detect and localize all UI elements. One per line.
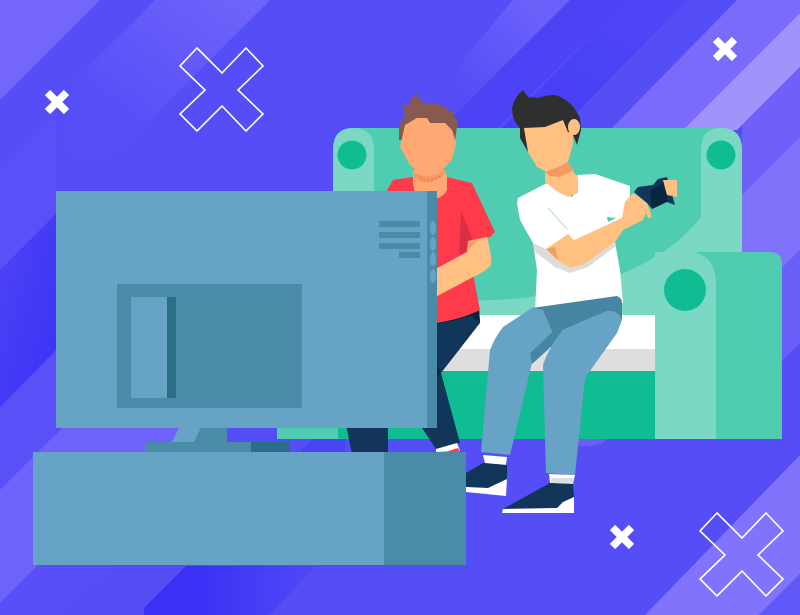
- tv stand base shade: [251, 442, 290, 452]
- elbow shadow: [468, 240, 478, 250]
- elbow shadow: [546, 247, 558, 260]
- shirt sleeve shadow: [459, 211, 473, 255]
- neck shadow: [545, 163, 574, 177]
- front armrest side: [693, 252, 782, 439]
- seat cushion: [400, 315, 656, 349]
- neck: [413, 170, 447, 198]
- tv stand base: [145, 442, 251, 452]
- tv stand neck dark: [194, 428, 227, 442]
- small white X bottom: [612, 528, 632, 546]
- person in white shirt: [466, 90, 677, 513]
- armrest button: [664, 269, 706, 311]
- trousers back leg: [345, 420, 388, 454]
- sofa lower back band: [370, 217, 742, 320]
- trouser waist shadow: [430, 308, 480, 324]
- sofa base left end: [277, 420, 338, 439]
- left sofa pillar: [333, 128, 374, 300]
- small white X top right: [716, 40, 734, 58]
- front shoe sole: [502, 497, 574, 513]
- arm shadow on shirt: [533, 242, 616, 273]
- neck: [545, 163, 578, 197]
- front shoe: [503, 483, 574, 509]
- tv stand neck light: [172, 428, 201, 442]
- hand on controller: [663, 180, 677, 197]
- panel inset dark: [167, 297, 176, 398]
- tv vent lines: [379, 221, 420, 258]
- trousers: [420, 309, 480, 449]
- white shirt: [517, 174, 630, 312]
- sofa back: [333, 128, 742, 320]
- shoe accent: [445, 448, 460, 452]
- face: [524, 120, 573, 171]
- tv rear panel: [117, 284, 302, 408]
- cabinet side: [384, 452, 466, 565]
- hair: [399, 93, 458, 140]
- front sock shade: [550, 478, 574, 484]
- panel inset light: [131, 297, 167, 398]
- front leg: [543, 311, 622, 475]
- back shoe sole: [466, 479, 507, 496]
- sofa base: [338, 371, 656, 439]
- red shoe: [436, 443, 460, 452]
- arm: [546, 193, 652, 268]
- forearm: [430, 237, 491, 300]
- decorative outline X bottom right: [700, 513, 783, 596]
- hair wedge: [563, 118, 569, 132]
- back leg: [481, 308, 552, 455]
- neck shadow: [413, 170, 445, 183]
- necklace: [420, 176, 440, 180]
- tv back: [56, 191, 427, 428]
- person in red shirt: [345, 93, 495, 454]
- tv side: [427, 191, 437, 428]
- small white X left: [48, 92, 66, 112]
- sofa: [277, 128, 782, 439]
- sleeve seam: [548, 208, 567, 229]
- hair: [512, 90, 581, 152]
- tv cabinet: [33, 452, 466, 565]
- seat cushion shadow: [400, 349, 656, 371]
- cabinet front: [33, 452, 384, 565]
- face: [400, 118, 456, 176]
- socks back: [483, 455, 507, 465]
- right pillar button: [706, 140, 736, 170]
- shirt gap: [607, 217, 616, 222]
- tv side buttons: [430, 221, 436, 283]
- red shirt: [380, 177, 495, 324]
- ear: [568, 119, 580, 135]
- front armrest face: [655, 252, 716, 439]
- front sock: [549, 474, 575, 484]
- right sofa pillar: [701, 128, 742, 260]
- back shoe: [466, 463, 507, 488]
- television: [56, 191, 437, 452]
- left pillar button: [338, 140, 366, 170]
- hip shadow: [530, 296, 622, 364]
- trouser thigh shadow: [437, 365, 441, 378]
- decorative outline X top: [180, 48, 263, 131]
- game controller: [634, 177, 675, 209]
- controller grip: [650, 183, 668, 209]
